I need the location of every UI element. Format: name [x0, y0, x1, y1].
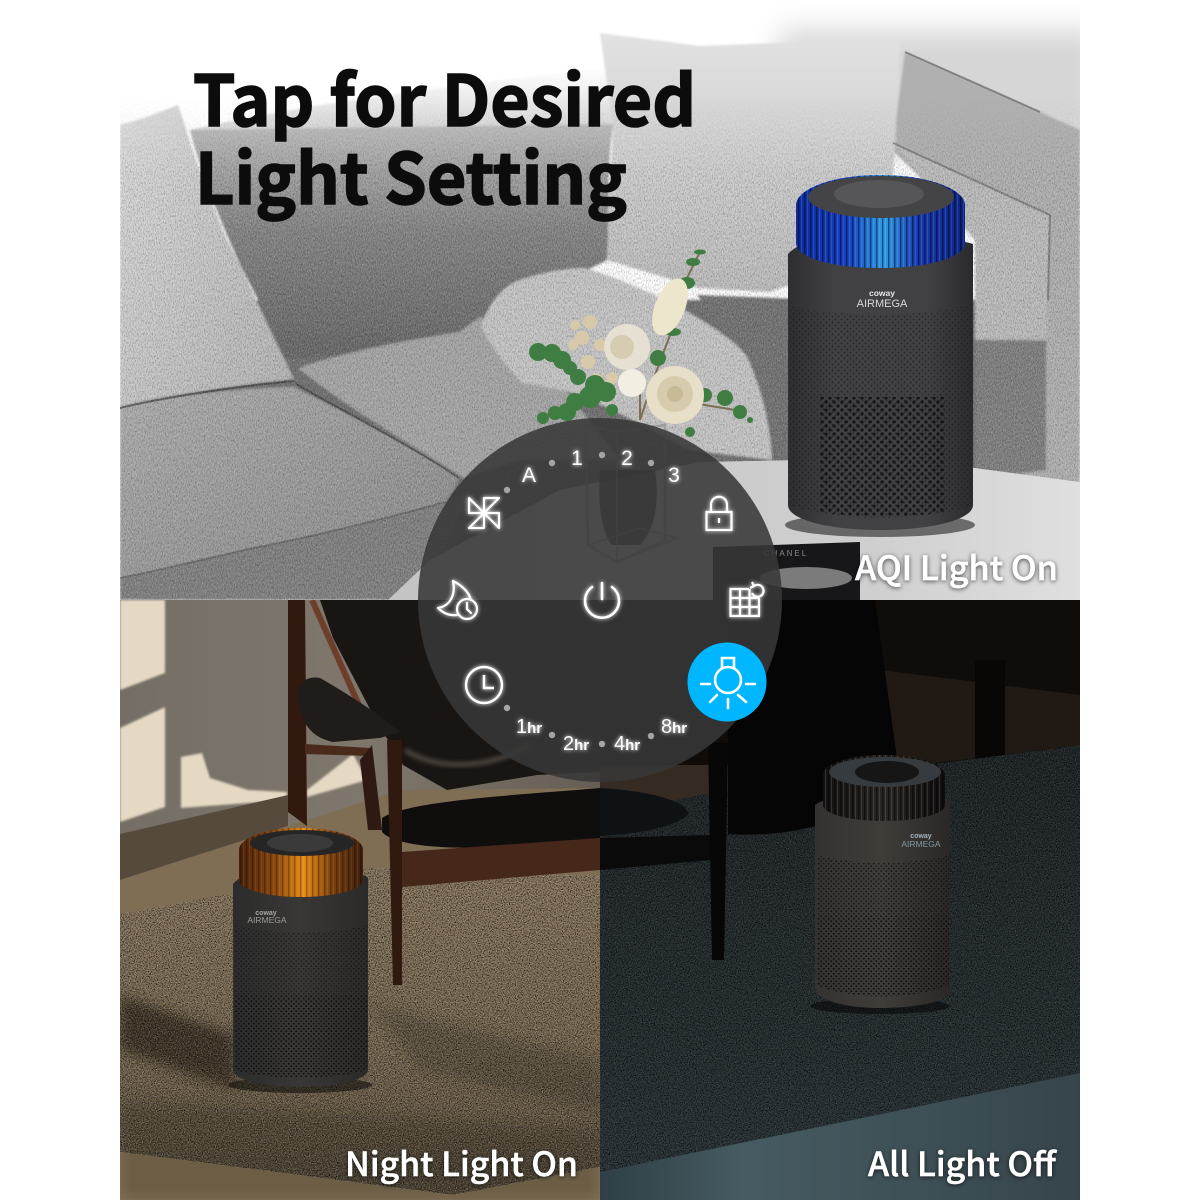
brand text: coway [869, 288, 895, 298]
large rose [646, 366, 704, 424]
timer dots [504, 705, 654, 747]
carpet texture [120, 860, 600, 1200]
right seat behind bouquet [696, 294, 788, 302]
arm pad [297, 678, 400, 742]
fan speed labels: 1 [571, 447, 583, 470]
lit band on far floor [880, 670, 1080, 770]
carpet [120, 868, 600, 1195]
vase in glass frame [600, 424, 666, 545]
cast shadow [785, 518, 975, 537]
sofa arm far right [894, 52, 1080, 482]
left throw pillow [120, 105, 294, 406]
fan speed labels: 3 [668, 464, 680, 487]
fan speed labels: 2 [621, 447, 633, 470]
brand text: coway [910, 833, 932, 840]
dark drum behind [728, 600, 900, 835]
cylinder body [815, 790, 950, 1008]
second seat cushion [298, 316, 620, 478]
panel: AQI light on, grey sofa scene [120, 0, 1100, 600]
seat cushion [382, 788, 600, 848]
floor patch behind chair [600, 765, 728, 815]
purifier with light off [810, 755, 950, 1014]
right back pillow [600, 33, 900, 292]
heading: Light Setting [195, 124, 627, 225]
round table [388, 458, 1080, 600]
dried sprigs [568, 315, 618, 387]
perforation [235, 925, 367, 1078]
eucalyptus leaves [529, 250, 753, 437]
wood floor [120, 788, 600, 1000]
speed dots [504, 452, 654, 493]
rose left [604, 324, 650, 370]
timer labels: 4hr [614, 733, 640, 755]
foreground floor [120, 1152, 600, 1200]
purifier with light off: AIRMEGA [901, 839, 941, 849]
back pad above cushion [190, 68, 615, 130]
icon: fan pinwheel [469, 498, 499, 528]
icon: timer clock [466, 667, 502, 703]
wood floor foreground [600, 1073, 1080, 1200]
slanted support [360, 745, 382, 830]
front leg [387, 740, 402, 985]
label: All Light Off: All Light Off [868, 1138, 1058, 1186]
dark backing between cushions [124, 298, 976, 552]
blue light ring [796, 175, 965, 268]
icon: light button selected [688, 642, 766, 722]
floor shadow [810, 998, 950, 1014]
amber light ring [239, 828, 363, 897]
fan speed labels [522, 447, 680, 487]
panel: night light on, warm room [120, 600, 600, 1200]
purifier with blue AQI light: AIRMEGA [857, 298, 908, 310]
baseboard [120, 795, 288, 880]
label: Night Light On: Night Light On [345, 1138, 578, 1186]
panel: all light off, dark room [600, 600, 1080, 1200]
top control disc [829, 757, 941, 787]
arm front face [893, 143, 1050, 340]
darker sofa side [975, 340, 1046, 480]
stems [640, 252, 735, 420]
purifier with amber night light: AIRMEGA [247, 915, 287, 925]
leather back [320, 600, 600, 790]
rear chair leg [288, 600, 307, 826]
cylinder body [788, 232, 973, 530]
timer labels [516, 716, 687, 755]
curved wood back [312, 600, 362, 712]
icon: sleep moon and clock [438, 581, 477, 619]
chair seat and leg [600, 743, 728, 960]
floor shadow [228, 1077, 372, 1093]
brand text: coway [255, 910, 277, 917]
top control disc [808, 176, 954, 218]
carpet [600, 745, 1080, 1172]
upper perforation [790, 303, 973, 518]
seat front band [120, 503, 446, 600]
book on table: CHANEL [764, 549, 808, 558]
book on table [713, 542, 860, 600]
lounge chair [288, 600, 600, 985]
control dial [418, 418, 782, 782]
icon: power [585, 583, 619, 618]
sunlit wall patches [120, 600, 367, 822]
top control disc [250, 830, 354, 856]
white wall background [120, 0, 1080, 600]
dark ribbed ring [823, 755, 945, 821]
heading: Tap for Desired [193, 46, 696, 147]
timer labels: 1hr [516, 716, 542, 738]
translucent dial disc [418, 418, 782, 782]
wood rail [402, 838, 600, 887]
small white bud [618, 369, 646, 397]
carpet texture [600, 740, 1080, 1180]
folded blanket [481, 268, 772, 460]
cylinder body [233, 864, 368, 1087]
rear stretcher [305, 744, 370, 756]
front seat cushion [120, 387, 459, 578]
sofa seam lines [120, 52, 1050, 578]
fabric texture [120, 105, 1080, 600]
tulip [652, 278, 688, 336]
dark room background [600, 600, 1080, 1200]
carpet shadows [120, 995, 600, 1200]
soft grey wall top right [780, 30, 1100, 150]
fan speed labels: A [522, 464, 536, 487]
timer labels: 8hr [661, 716, 687, 738]
purifier with blue AQI light [785, 175, 975, 537]
perforation [817, 855, 949, 996]
heading [194, 68, 692, 222]
purifier with amber night light [228, 828, 372, 1093]
icon: lock [706, 497, 732, 530]
timer labels: 2hr [563, 733, 589, 755]
flower bouquet [529, 250, 753, 437]
lower perforation [820, 397, 945, 516]
central back cushion [190, 124, 613, 358]
side table leg [975, 660, 1005, 770]
shadowed wall [120, 600, 600, 900]
icon: filter reset grid [730, 582, 764, 616]
sofa upholstery group [120, 33, 1080, 600]
label: AQI Light On: AQI Light On [855, 542, 1058, 590]
